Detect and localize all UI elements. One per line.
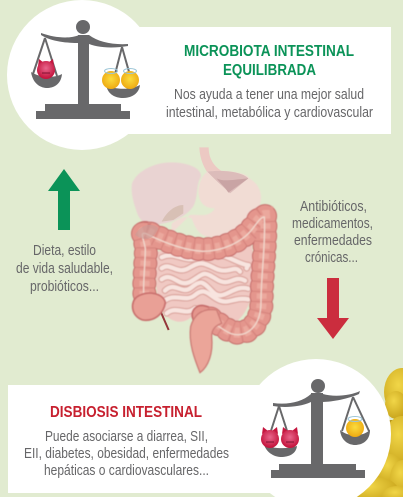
esophagus [199,147,228,182]
text: negative factors: enfermedades [294,232,372,249]
icon: angel emoji [346,416,364,437]
panel: balanced microbiota [100,27,391,134]
icon: unbalanced scale [241,359,391,497]
heading: microbiota: EQUILIBRADA [223,62,316,79]
text: associated conditions: hepáticas o cardiovasculares... [44,462,209,479]
text: positive factors: de vida saludable, [16,260,113,277]
appendix [161,312,169,330]
stomach [172,171,261,237]
illustration: digestive system [132,147,265,373]
panel: dysbiosis [8,385,308,493]
text: associated conditions: EII, diabetes, obesidad, enfermedades [24,445,229,462]
text: negative factors: medicamentos, [292,215,373,232]
icon: balanced scale [7,0,157,150]
icon: devil emojis [261,427,299,448]
text: positive factors: probióticos... [30,278,99,295]
small intestine [156,245,254,322]
arrow: red down [317,278,349,339]
text: negative factors: crónicas... [305,249,358,266]
heading: microbiota [184,43,354,79]
text: negative factors [292,198,373,266]
text: positive factors: Dieta, estilo [33,242,96,259]
text: benefits: Nos ayuda a tener una mejor salud [174,86,364,103]
yellow bacteria decoration [340,368,403,497]
cecum [133,293,165,320]
text: associated conditions: Puede asociarse a diarrea, SII, [45,428,208,445]
icon: angel emojis [102,68,139,89]
text: benefits [166,86,373,121]
text: associated conditions [24,428,229,479]
text: positive factors [16,242,113,295]
liver [132,162,201,225]
rectum [190,310,222,373]
arrow: green up [48,169,80,230]
colon [142,215,265,335]
hepatic flexure overlap [135,225,158,239]
icon: devil emoji [37,59,55,79]
heading: dysbiosis: DISBIOSIS INTESTINAL [50,404,202,421]
text: negative factors: Antibióticos, [300,198,367,215]
heading: microbiota: MICROBIOTA INTESTINAL [184,43,354,60]
